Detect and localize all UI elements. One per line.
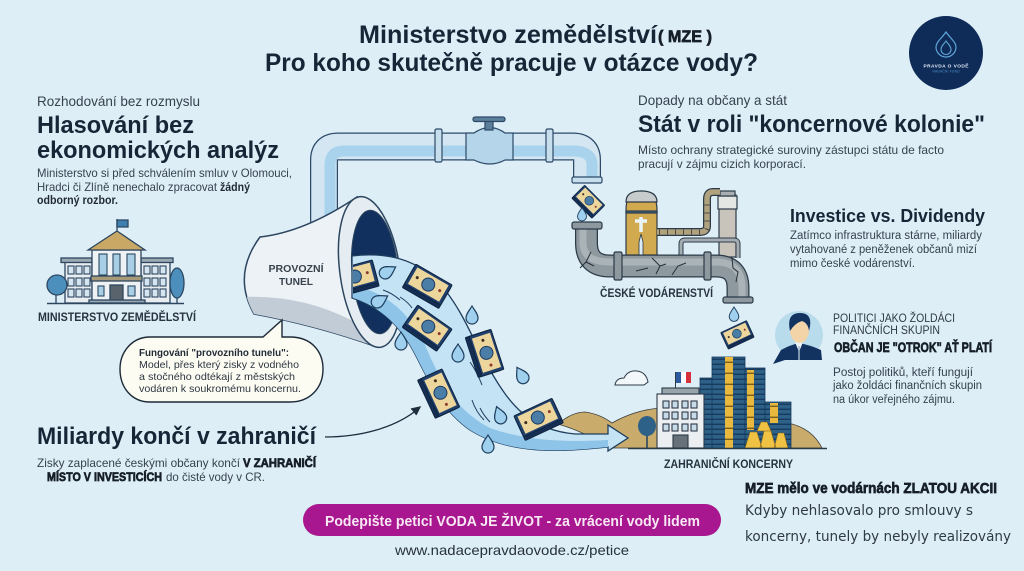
petition button (303, 504, 721, 536)
gold columns (725, 357, 788, 448)
valve (466, 117, 513, 164)
text block: left intro: odborný rozbor. (37, 193, 118, 207)
door (110, 285, 123, 301)
text block: left intro: žádný (220, 180, 250, 194)
text block: impacts (638, 92, 985, 171)
flag (117, 219, 128, 231)
icon: politician (773, 311, 823, 364)
text block: impacts: Stát v roli "koncernové kolonie" (638, 111, 985, 138)
text block: politicians: Postoj politiků, kteří fungují (833, 367, 974, 379)
main cracked pipe (586, 229, 738, 298)
rusty pipe (657, 192, 720, 232)
tree left (47, 275, 67, 303)
arrow to stream (325, 407, 420, 437)
blue pipe with valve (324, 117, 602, 240)
label: foreign concerns: ZAHRANIČNÍ KONCERNY (664, 458, 793, 471)
central block (92, 250, 141, 303)
text block: impacts: Dopady na občany a stát (638, 92, 787, 108)
callout: provozní tunel: Fungování "provozního tunelu": (139, 347, 289, 359)
grey bypass pipe (681, 240, 738, 258)
cracks (580, 252, 738, 282)
text block: billions abroad: do čisté vody v CR. (166, 470, 265, 484)
text block: politicians: na úkor veřejného zájmu. (833, 394, 955, 406)
logo: Pravda o vodě: NADAČNÍ FOND (932, 68, 960, 74)
text block: billions abroad: Miliardy končí v zahraničí (37, 423, 317, 450)
title: Ministerstvo zemědělství (359, 21, 658, 49)
foreign concerns scene (615, 357, 827, 448)
office building (657, 388, 704, 448)
falling bill and drop from tap (572, 185, 605, 221)
logo: Pravda o vodě (909, 16, 983, 90)
pipe flanges (435, 129, 602, 183)
text block: left intro: Hlasování bez (37, 112, 194, 139)
tank (626, 191, 657, 255)
title (265, 21, 758, 77)
ground (47, 300, 184, 304)
text block: investment vs dividends: mimo české vodárenství. (790, 258, 915, 270)
text block: politicians (832, 310, 993, 406)
water plant: České vodárenství (572, 191, 753, 303)
tunnel cone labelled Provozní tunel (244, 196, 399, 348)
chimney (718, 191, 737, 257)
roof (88, 231, 145, 250)
text block: investment vs dividends: Investice vs. Dividendy (790, 205, 986, 226)
tree (638, 416, 656, 448)
text block: left intro: Hradci či Zlíně nenechalo zpracovat (37, 180, 218, 194)
tunnel cone labelled Provozní tunel: TUNEL (279, 276, 314, 288)
tunnel cone labelled Provozní tunel: PROVOZNÍ (268, 262, 325, 275)
label: ministry: MINISTERSTVO ZEMĚDĚLSTVÍ (38, 309, 197, 324)
text block: investment vs dividends: vytahované z peněženek občanů mizí (790, 244, 978, 256)
text block: golden share (745, 480, 1011, 545)
icon: ministry building (47, 219, 184, 304)
cloud (615, 371, 648, 385)
callout: provozní tunel: vodáren k soukromému koncernu. (139, 383, 301, 395)
text block: politicians: FINANČNÍCH SKUPIN (833, 322, 940, 337)
text block: left intro: Rozhodování bez rozmyslu (37, 93, 200, 109)
water drops (369, 262, 531, 453)
text block: politicians: jako žoldáci finančních skupin (832, 380, 982, 392)
text block: left intro: ekonomických analýz (37, 137, 279, 164)
water stream with money (332, 255, 628, 453)
text block: left intro: Ministerstvo si před schválením smluv v Olomouci, (37, 166, 292, 180)
text block: golden share: MZE mělo ve vodárnách ZLATOU AKCII (745, 480, 997, 497)
text block: golden share: koncerny, tunely by nebyly realizovány (745, 529, 1011, 545)
central windows (98, 254, 135, 296)
callout: provozní tunel: a stočného odtékají z městských (139, 371, 295, 383)
text block: politicians: POLITICI JAKO ŽOLDÁCI (833, 310, 955, 325)
wing windows (68, 266, 166, 297)
ground line (628, 448, 827, 450)
flow lines (383, 290, 490, 422)
label: water sector: ČESKÉ VODÁRENSTVÍ (600, 285, 714, 300)
hills behind the stream (558, 408, 705, 448)
callout: provozní tunel: Model, přes který zisky z vodného (139, 359, 299, 371)
text block: impacts: Místo ochrany strategické suroviny zástupci státu de facto (638, 143, 944, 157)
callout: provozní tunel (120, 320, 323, 402)
money stacks (700, 357, 791, 448)
text block: impacts: pracují v zájmu cizich korporací. (638, 157, 806, 171)
logo: Pravda o vodě: PRAVDA O VODĚ (924, 62, 969, 70)
bills (332, 260, 563, 440)
text block: investment vs dividends (790, 205, 986, 270)
text block: billions abroad: Zisky zaplacené českými občany končí (37, 456, 241, 470)
title: ( MZE ) (658, 27, 712, 46)
text block: investment vs dividends: Zatímco infrastruktura stárne, miliardy (790, 230, 982, 242)
French flag (676, 372, 691, 388)
flanges (572, 222, 753, 303)
petition URL: www.nadacepravdaovode.cz/petice (394, 542, 629, 558)
petition button: Podepište petici VODA JE ŽIVOT - za vrácení vody lidem (325, 512, 700, 530)
falling bill and drop to foreign concerns (721, 307, 754, 349)
right hill (788, 423, 822, 448)
text block: billions abroad (37, 423, 317, 484)
text block: golden share: Kdyby nehlasovalo pro smlouvy s (745, 503, 973, 519)
cornice (91, 276, 142, 281)
text block: billions abroad: MÍSTO V INVESTICÍCH (47, 469, 162, 484)
text block: left intro (37, 93, 292, 207)
title: Pro koho skutečně pracuje v otázce vody? (265, 49, 758, 77)
wings (61, 258, 173, 303)
text block: billions abroad: V ZAHRANIČÍ (243, 455, 317, 470)
tree right (170, 268, 184, 303)
